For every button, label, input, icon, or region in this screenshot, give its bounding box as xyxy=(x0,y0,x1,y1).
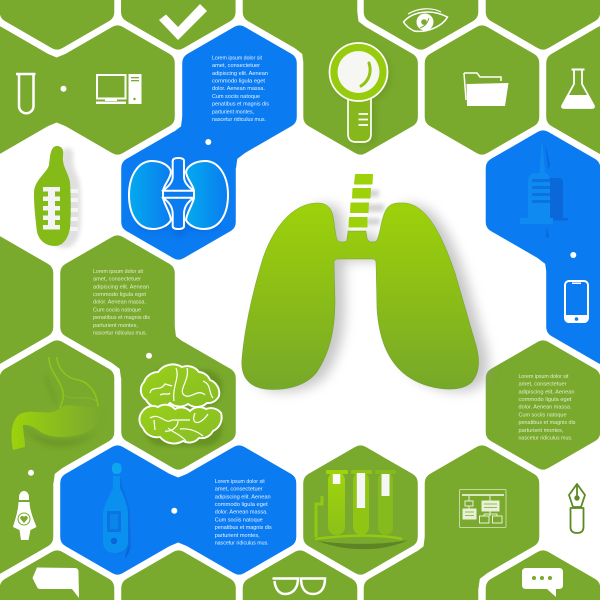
text block: blue bottom: Lorem ipsum dolor sit xyxy=(215,479,265,485)
text block: green middle left: dolor. Aenean massa. xyxy=(93,300,146,306)
text block: green middle left: Lorem ipsum dolor sit xyxy=(93,269,143,275)
icon: folder xyxy=(464,73,508,106)
text block: blue bottom: amet, consectetuer xyxy=(215,487,263,493)
panel: green right text hexagon xyxy=(496,351,590,459)
text block: blue top: nascetur ridiculus mus. xyxy=(212,117,266,123)
icon: magnifier xyxy=(330,43,391,144)
panel: top-right hexagon xyxy=(496,0,590,39)
text block: green right: Cum sociis natoque xyxy=(518,412,566,418)
text block: green middle left: penatibus et magnis dis xyxy=(93,315,150,321)
icon: speech bubble xyxy=(32,568,79,598)
panel: stomach and woman hexagon xyxy=(0,351,104,564)
text block: green right: parturient montes, xyxy=(518,428,564,434)
text block: blue top: Lorem ipsum dolor sit xyxy=(212,56,262,62)
text block: green right: amet, consectetuer xyxy=(518,382,567,388)
panel: eye hexagon xyxy=(374,0,468,39)
text block: blue top: adipiscing elit. Aenean xyxy=(212,71,268,77)
text block: green middle left xyxy=(93,269,150,336)
text block: green middle left: parturient montes, xyxy=(93,323,138,329)
panel: flask hexagon xyxy=(557,36,600,144)
text block: blue top: Cum sociis natoque xyxy=(212,94,260,100)
panel: test tube and computer merged hexagon xyxy=(0,36,164,144)
icon: stomach xyxy=(11,357,104,450)
central lungs illustration xyxy=(242,174,489,392)
text block: blue top: commodo ligula eget xyxy=(212,79,265,85)
text block: green right xyxy=(518,374,576,442)
panel: blue text and kidneys hexagon xyxy=(132,36,286,249)
icon: chat bubble xyxy=(522,568,563,597)
panel: chat hexagon xyxy=(496,561,590,600)
icon: eye xyxy=(404,9,448,31)
panel: test tubes hexagon xyxy=(314,456,407,564)
text block: blue bottom: adipiscing elit. Aenean xyxy=(215,494,271,500)
text block: blue bottom: dolor. Aenean massa. xyxy=(215,510,268,516)
panel: glasses hexagon xyxy=(253,561,347,600)
icon: computer xyxy=(96,74,142,104)
icon: fountain pen xyxy=(569,484,585,533)
text block: blue top: parturient montes, xyxy=(212,109,254,115)
panel: blue syringe and phone hexagon xyxy=(496,141,600,354)
panel: speech hexagon xyxy=(10,561,104,600)
icon: test tubes rack xyxy=(315,470,408,549)
icon: check mark xyxy=(159,4,207,40)
icon: flow chart xyxy=(460,490,506,528)
text block: blue top: amet, consectetuer xyxy=(212,63,260,69)
text block: green right: adipiscing elit. Aenean xyxy=(518,389,574,395)
text block: blue top: penatibus et magnis dis xyxy=(212,102,269,108)
icon: test tube xyxy=(16,74,36,113)
text block: green right: Lorem ipsum dolor sit xyxy=(518,374,569,380)
text block: green middle left: commodo ligula eget xyxy=(93,292,146,298)
icon: kidneys xyxy=(129,158,228,236)
panel: magnifier merged hexagon xyxy=(253,0,407,144)
panel: top-left hexagon xyxy=(10,0,104,39)
text block: green middle left: Cum sociis natoque xyxy=(93,307,141,313)
panel: blue thermometer and text hexagon xyxy=(71,456,286,564)
text block: blue top: dolor. Aenean massa. xyxy=(212,86,265,92)
text block: green right: nascetur ridiculus mus. xyxy=(518,436,573,442)
text block: blue bottom xyxy=(215,479,272,546)
icon: woman figure xyxy=(13,491,36,540)
text block: blue bottom: nascetur ridiculus mus. xyxy=(215,540,269,546)
text block: green middle left: amet, consectetuer xyxy=(93,277,141,283)
panel: check hexagon xyxy=(132,0,225,39)
text block: blue bottom: penatibus et magnis dis xyxy=(215,525,272,531)
text block: green right: penatibus et magnis dis xyxy=(518,420,576,426)
icon: syringe xyxy=(520,143,568,238)
text block: blue top xyxy=(212,56,269,123)
icon: digital thermometer xyxy=(103,463,131,559)
panel: bottom hexagon xyxy=(132,561,225,600)
text block: blue bottom: Cum sociis natoque xyxy=(215,517,263,523)
text block: green middle left: nascetur ridiculus mus. xyxy=(93,330,147,336)
icon: baby bottle thermometer xyxy=(34,146,81,248)
panel: folder hexagon xyxy=(435,36,529,144)
text block: blue bottom: commodo ligula eget xyxy=(215,502,268,508)
panel: chart merged hexagon xyxy=(374,456,529,600)
icon: smartphone xyxy=(565,281,588,323)
text block: green right: dolor. Aenean massa. xyxy=(518,405,572,411)
icon: brain xyxy=(139,364,222,446)
text block: blue bottom: parturient montes, xyxy=(215,533,260,539)
panel: green text and brain hexagon xyxy=(71,246,225,459)
text block: green middle left: adipiscing elit. Aenean xyxy=(93,284,149,290)
icon: glasses xyxy=(272,578,325,594)
icon: flask xyxy=(562,70,594,108)
panel: left edge hexagon xyxy=(0,246,43,354)
connector dots xyxy=(28,86,576,514)
text block: green right: commodo ligula eget xyxy=(518,397,572,403)
